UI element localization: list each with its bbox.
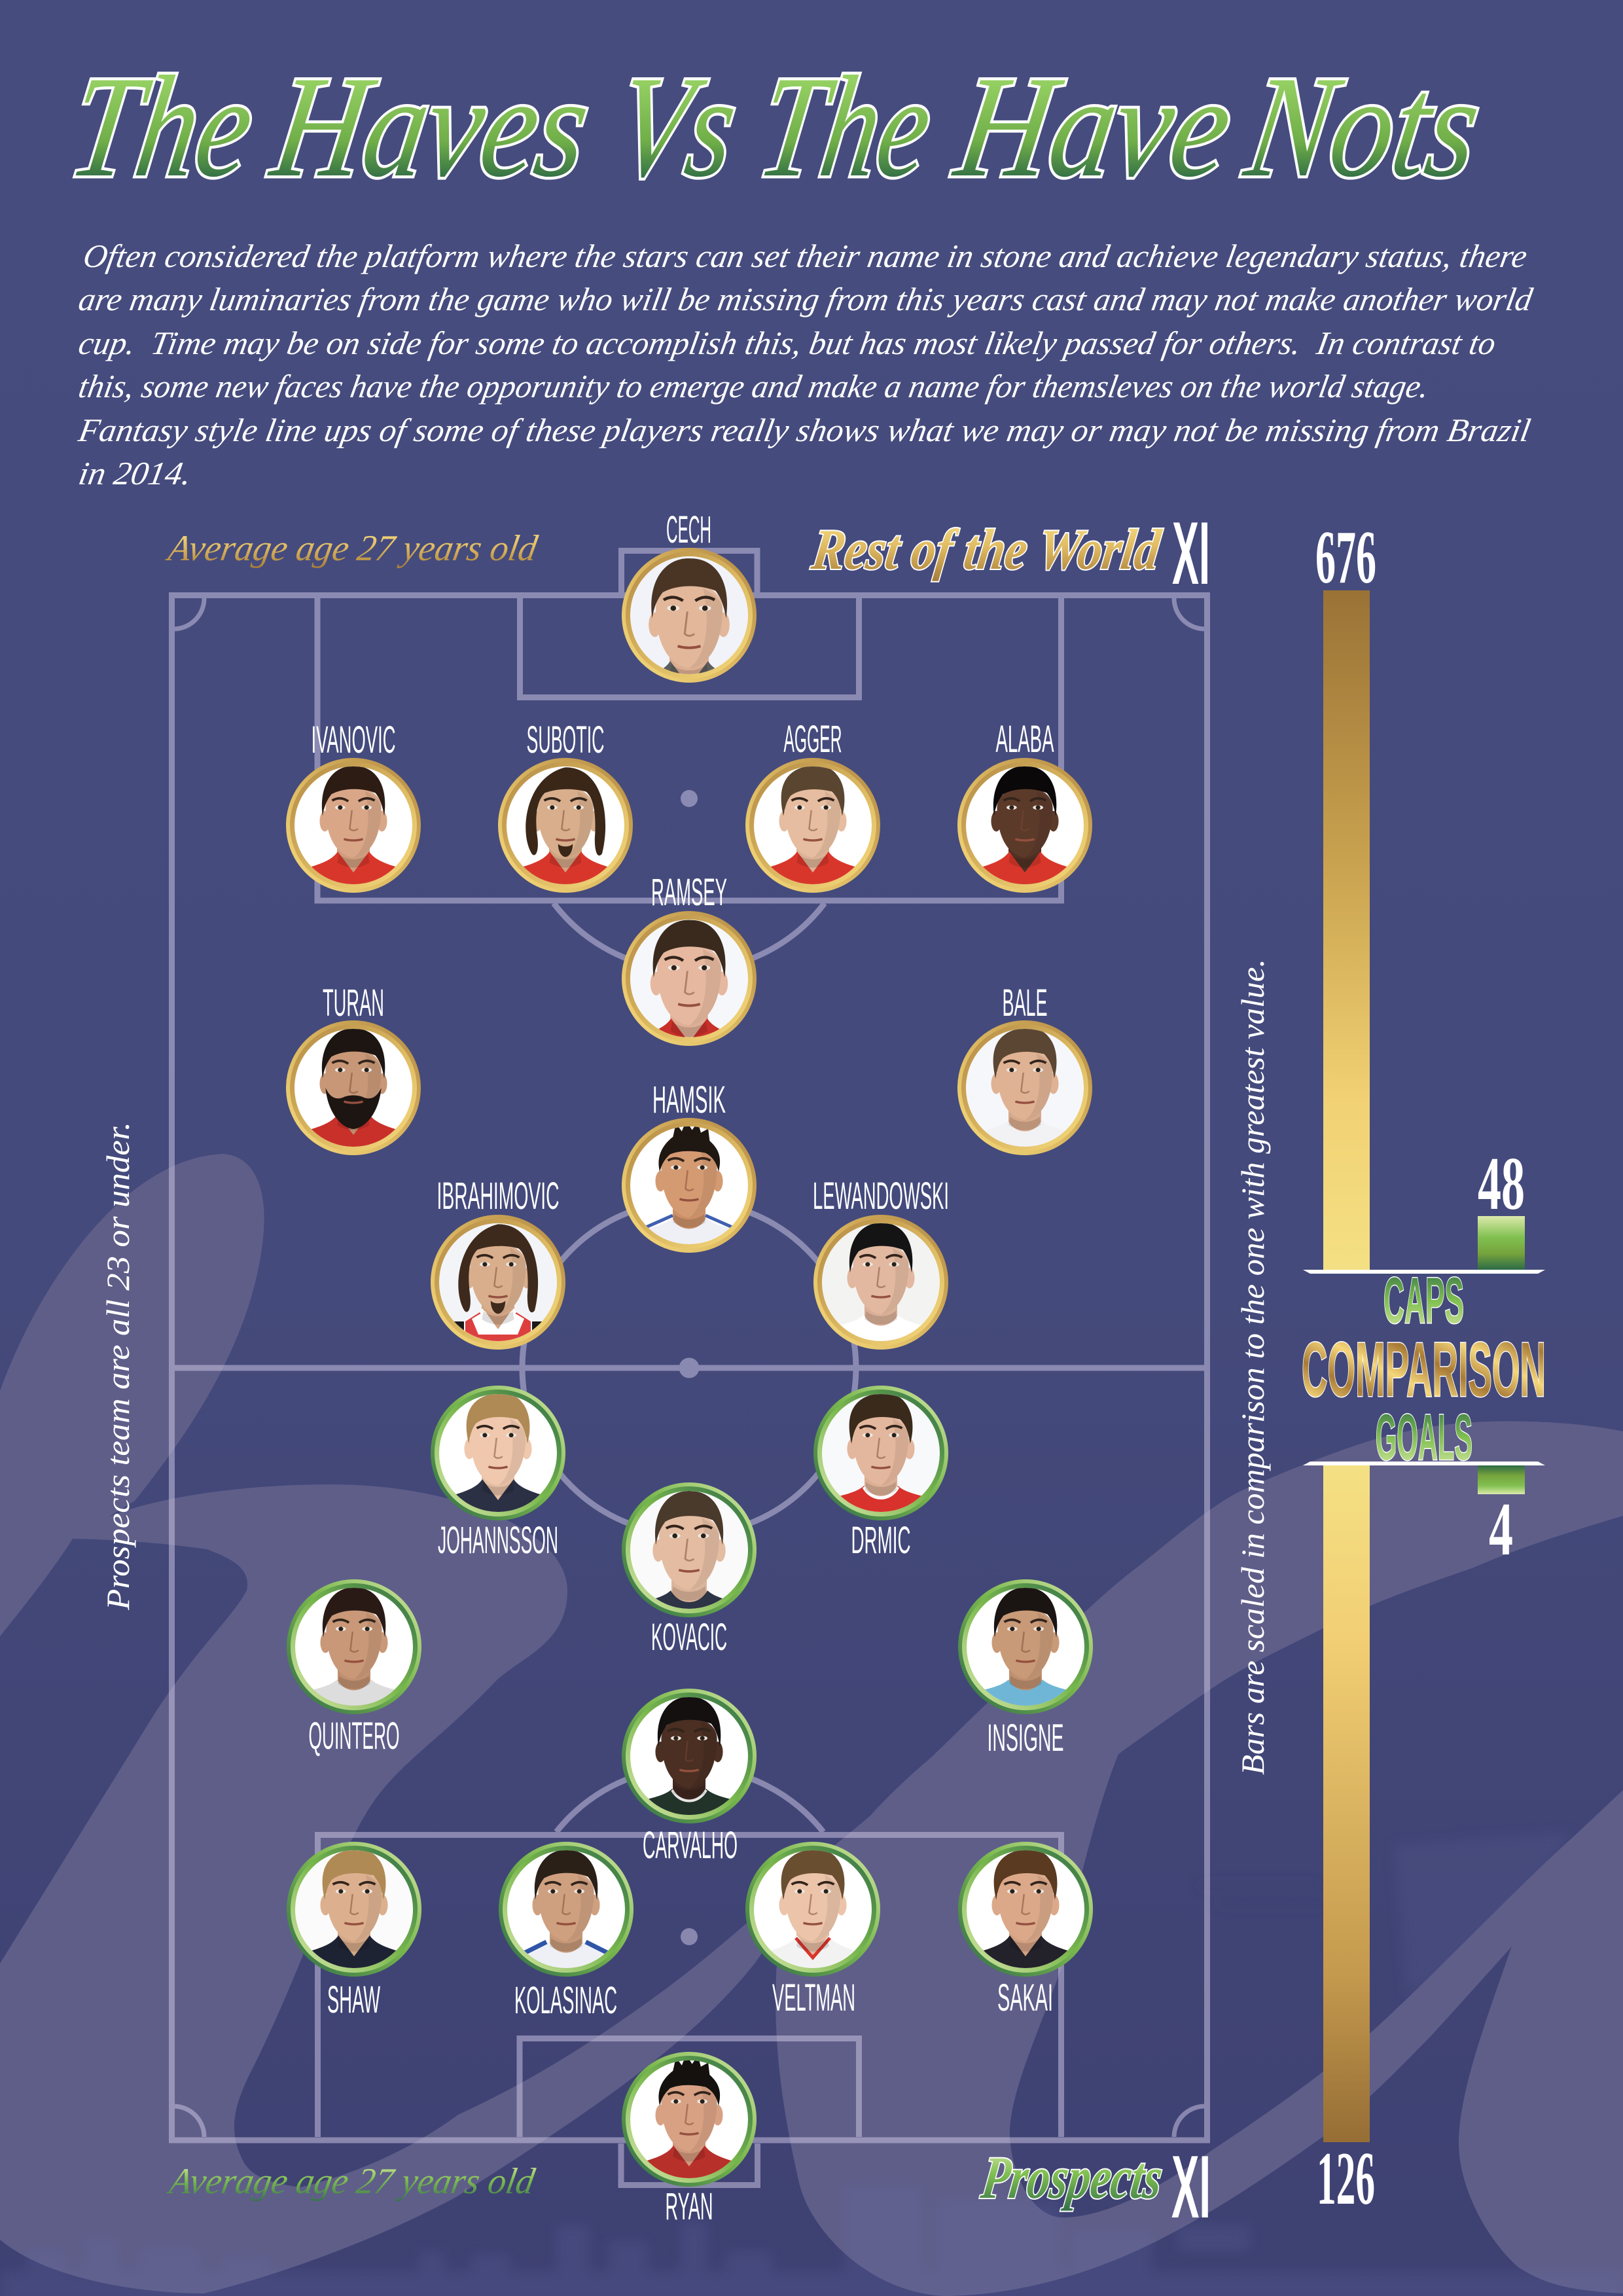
player: INSIGNE: [958, 1579, 1093, 1759]
bar chart: caps and goals comparison: GOALS: [1376, 1401, 1472, 1473]
title: [60, 46, 1490, 207]
player: KOVACIC: KOVACIC: [651, 1616, 727, 1659]
player: ALABA: [957, 718, 1092, 896]
team heading: prospects XI: [977, 2137, 1211, 2236]
player: IVANOVIC: IVANOVIC: [312, 719, 395, 761]
caps bar: prospects: [1478, 1216, 1525, 1270]
player: QUINTERO: QUINTERO: [309, 1715, 399, 1757]
player: CECH: [622, 516, 757, 683]
goals value: rest of the world: 126: [1317, 2137, 1375, 2221]
player: AGGER: [745, 718, 880, 896]
team heading: rest of the world XI: [808, 503, 1210, 603]
player: KOLASINAC: KOLASINAC: [514, 1979, 617, 2022]
title: Nots: [1236, 46, 1490, 207]
player: RAMSEY: RAMSEY: [651, 871, 727, 914]
intro paragraph: in 2014.: [76, 455, 194, 492]
player: BALE: BALE: [1003, 982, 1047, 1024]
goals bar: prospects: [1478, 1465, 1525, 1494]
player: HAMSIK: HAMSIK: [652, 1079, 726, 1121]
player: AGGER: AGGER: [784, 718, 842, 761]
text: LEWANDOWSKI: [813, 1175, 949, 1217]
player: CECH: CECH: [666, 509, 711, 551]
intro paragraph: cup. Time may be on side for some to accomplish this, but has most likely passed for others. In contrast to: [76, 325, 1499, 361]
player: INSIGNE: INSIGNE: [987, 1717, 1064, 1759]
player: CARVALHO: CARVALHO: [643, 1824, 738, 1867]
title: The: [60, 46, 264, 207]
player: IBRAHIMOVIC: [431, 1175, 565, 1353]
text: XI: [1172, 503, 1210, 603]
player: JOHANNSSON: [431, 1386, 565, 1562]
player: SUBOTIC: [498, 719, 633, 896]
player: DRMIC: DRMIC: [851, 1519, 911, 1562]
background swash: big script letter: [0, 1421, 1623, 2296]
bar chart: caps and goals comparison: CAPS: [1383, 1264, 1464, 1336]
player: BALE: [957, 982, 1092, 1158]
goals bar: rest of the world: [1323, 1465, 1370, 2142]
intro paragraph: Fantasy style line ups of some of these players really shows what we may or may not be missing from Brazil: [75, 412, 1533, 448]
player: RAMSEY: [622, 878, 757, 1046]
text: XI: [1171, 2137, 1211, 2236]
intro paragraph: this, some new faces have the opporunity to emerge and make a name for themsleves on the world stage.: [76, 368, 1432, 404]
player: LEWANDOWSKI: [813, 1175, 949, 1353]
player: CARVALHO: [622, 1689, 757, 1867]
player: SAKAI: [958, 1842, 1093, 2019]
title: Vs: [607, 46, 747, 207]
player: DRMIC: [813, 1386, 948, 1562]
team heading: prospects XI: Prospects: [977, 2144, 1166, 2211]
player: SHAW: [287, 1842, 421, 2021]
side note: bar scale: Bars are scaled in comparison to the one with greatest value.: [1234, 959, 1271, 1775]
player: IVANOVIC: [286, 719, 421, 896]
axis: caps: [1303, 1270, 1545, 1274]
bar chart: caps and goals comparison: [1302, 516, 1546, 2221]
side note: prospects age: Prospects team are all 23 or under.: [99, 1122, 136, 1611]
background: faded skyline: [0, 2186, 1623, 2296]
title: Haves: [262, 46, 599, 207]
player: TURAN: [286, 982, 421, 1158]
text: JOHANNSSON: [438, 1519, 558, 1562]
axis: goals: [1303, 1462, 1545, 1465]
player: RYAN: [622, 2052, 757, 2228]
title: Have: [946, 46, 1242, 207]
caps bar: rest of the world: [1323, 590, 1370, 1270]
caption: average age, prospects: Average age 27 years old: [164, 2161, 538, 2202]
caps value: prospects: 48: [1478, 1142, 1525, 1226]
caption: average age, rest of the world: Average age 27 years old: [163, 528, 541, 569]
background swash: upper-left lobe: [0, 1154, 264, 1636]
player: HAMSIK: [622, 1079, 757, 1256]
player: KOLASINAC: [499, 1842, 633, 2022]
player: QUINTERO: [287, 1579, 421, 1757]
player: RYAN: RYAN: [665, 2185, 713, 2228]
intro paragraph: are many luminaries from the game who will be missing from this years cast and may not make another world: [76, 281, 1536, 317]
caps value: rest of the world: 676: [1315, 516, 1376, 600]
intro paragraph: Often considered the platform where the stars can set their name in stone and achieve legendary status, there: [80, 238, 1530, 274]
player: VELTMAN: VELTMAN: [772, 1977, 855, 2019]
pitch: [171, 551, 1207, 2185]
player: SAKAI: SAKAI: [997, 1977, 1053, 2019]
goals value: prospects: 4: [1489, 1488, 1513, 1571]
player: KOVACIC: [622, 1482, 757, 1659]
intro paragraph: [75, 238, 1536, 492]
player: IBRAHIMOVIC: IBRAHIMOVIC: [437, 1175, 559, 1217]
player: SHAW: SHAW: [327, 1979, 380, 2021]
player: ALABA: ALABA: [996, 718, 1054, 761]
player: VELTMAN: [745, 1842, 880, 2019]
player: TURAN: TURAN: [323, 982, 384, 1024]
title: The: [749, 46, 942, 207]
player: SUBOTIC: SUBOTIC: [526, 719, 605, 761]
team heading: rest of the world XI: Rest of the World: [808, 518, 1165, 582]
